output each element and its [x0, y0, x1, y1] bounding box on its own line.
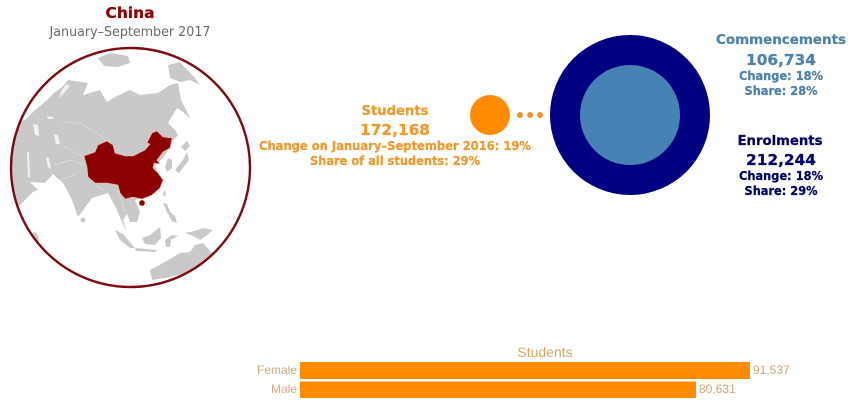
- land masses: [0, 53, 213, 280]
- globe outline: [11, 48, 250, 287]
- students text block: Students: [362, 104, 429, 119]
- inland seas: [27, 84, 70, 178]
- students text block: [259, 104, 531, 168]
- title: China: [106, 4, 154, 22]
- connector dots: [517, 112, 543, 118]
- enrolments text: 212,244: [746, 151, 816, 169]
- male bar: [300, 382, 696, 398]
- commencements circle: [580, 65, 680, 165]
- enrolments text: Change: 18%: [739, 169, 823, 183]
- china highlighted: [84, 131, 172, 206]
- commencements text: Change: 18%: [739, 69, 823, 83]
- commencements text: [716, 33, 846, 98]
- enrolments text: Enrolments: [738, 134, 823, 149]
- male label: Male: [271, 382, 297, 396]
- male value: 80,631: [699, 382, 736, 396]
- globe map: [0, 48, 250, 287]
- female label: Female: [257, 363, 297, 377]
- students text block: Share of all students: 29%: [310, 154, 480, 168]
- bar chart: [257, 344, 790, 398]
- enrolments text: [738, 134, 823, 198]
- subtitle: January–September 2017: [49, 25, 211, 40]
- enrolments circle: [550, 35, 710, 195]
- female bar: [300, 362, 750, 379]
- students text block: Change on January–September 2016: 19%: [259, 139, 531, 153]
- female value: 91,537: [753, 363, 790, 377]
- students circle: [470, 95, 510, 135]
- border lines: [55, 122, 125, 212]
- enrolments text: Share: 29%: [744, 184, 818, 198]
- commencements text: Commencements: [716, 33, 846, 48]
- students text block: 172,168: [360, 121, 430, 139]
- commencements text: 106,734: [746, 51, 816, 69]
- chart title: Students: [517, 344, 573, 360]
- commencements text: Share: 28%: [744, 84, 818, 98]
